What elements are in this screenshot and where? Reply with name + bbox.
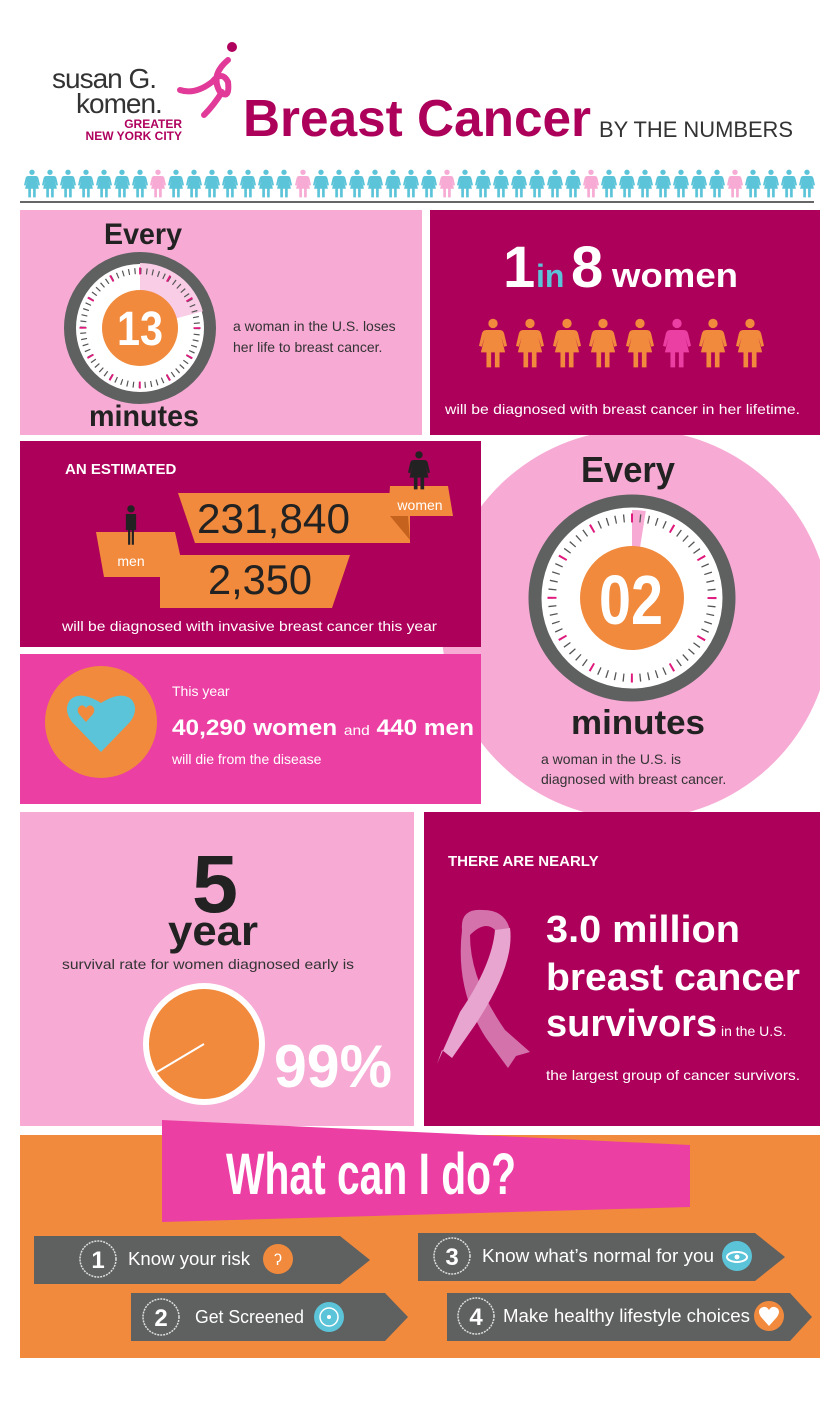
step 1: Know your risk	[128, 1249, 251, 1269]
panel: 5 year survival: year	[168, 907, 258, 954]
panel: every 02 minutes circle	[441, 429, 820, 819]
title	[243, 90, 793, 148]
step 1: 1	[91, 1247, 105, 1274]
panel: survivors: 3.0 million	[546, 909, 740, 951]
panel: this year deaths	[20, 654, 481, 804]
panel: an estimated	[20, 441, 481, 647]
women banner	[178, 493, 410, 543]
panel: an estimated: men	[117, 553, 145, 569]
panel: every 13 minutes	[20, 210, 422, 435]
icon: clock 13	[70, 258, 210, 398]
icon: ribbon figure	[180, 42, 237, 115]
text: loses her life: a woman in the U.S. loses	[233, 318, 396, 334]
step 3	[418, 1233, 785, 1281]
header logo: Susan G. Komen: NEW YORK CITY	[86, 129, 182, 143]
panel: survivors: the largest group of cancer survivors.	[546, 1067, 800, 1083]
panel: 1 in 8 women: 1	[503, 235, 535, 300]
panel: 5 year survival	[20, 812, 414, 1126]
step 3: Know what’s normal for you	[482, 1246, 714, 1266]
panel: survivors: survivors in the U.S.	[546, 1003, 786, 1045]
panel: this year deaths: This year	[172, 683, 230, 699]
panel: an estimated: 2,350	[208, 556, 312, 603]
panel: every 02 minutes circle: Every	[581, 449, 675, 490]
banner heading	[162, 1120, 690, 1222]
panel: 1 in 8 women: women	[611, 257, 738, 295]
pie chart 99%	[146, 986, 262, 1102]
panel: an estimated: women	[396, 497, 443, 513]
panel: 5 year survival: 99%	[274, 1033, 392, 1100]
panel: 1 in 8 women: in	[536, 258, 564, 294]
step 4: Make healthy lifestyle choices	[503, 1306, 750, 1326]
icon: clock 13: 13	[117, 303, 163, 356]
panel: survivors	[424, 812, 820, 1126]
panel: 1 in 8 women	[430, 210, 820, 435]
step 4: 4	[469, 1304, 483, 1331]
panel: what can I do: What can I do?	[226, 1142, 516, 1207]
panel: every 13 minutes: her life to breast cancer.	[233, 339, 382, 355]
step 2	[131, 1293, 408, 1341]
panel: survivors: THERE ARE NEARLY	[448, 853, 599, 870]
panel: every 02 minutes circle: diagnosed with breast cancer.	[541, 771, 726, 787]
icon: 8 women	[479, 319, 764, 367]
step 2: Get Screened	[195, 1307, 304, 1327]
icon: clock 02: 02	[599, 561, 663, 639]
panel: this year deaths: 40,290 women and 440 men	[172, 715, 474, 740]
panel: 5 year survival: survival rate for women diagnosed early is	[62, 956, 354, 972]
icon: pink ribbon	[437, 910, 530, 1068]
women tag	[388, 486, 453, 516]
panel: an estimated: 231,840	[197, 495, 350, 542]
panel: every 13 minutes: minutes	[89, 400, 199, 433]
header logo: Susan G. Komen	[52, 42, 237, 143]
icon: clock 02	[535, 501, 729, 695]
panel: 1 in 8 women: 8	[571, 235, 603, 300]
panel: 1 in 8 women: will be diagnosed with breast cancer in her lifetime.	[444, 401, 800, 417]
step 3: 3	[445, 1244, 459, 1271]
icon: man figure	[126, 505, 136, 545]
panel: an estimated: AN ESTIMATED	[65, 461, 177, 478]
panel: every 13 minutes: Every	[104, 218, 182, 251]
icon: woman figure	[408, 451, 430, 489]
panel: what can I do	[20, 1120, 820, 1358]
panel: survivors: breast cancer	[546, 957, 800, 999]
panel: an estimated: will be diagnosed with invasive breast cancer this year	[61, 618, 437, 634]
step 1: ʔ	[274, 1252, 282, 1269]
panel: every 02 minutes circle: a woman in the U.S. is	[541, 751, 681, 767]
step 4	[447, 1293, 812, 1341]
title: Breast Cancer	[243, 90, 591, 148]
panel: this year deaths: will die from the disease	[171, 751, 322, 767]
header logo: Susan G. Komen: GREATER	[124, 117, 182, 131]
panel: 5 year survival: 5	[192, 839, 238, 930]
step 2: 2	[154, 1305, 168, 1332]
panel: every 02 minutes circle: minutes	[571, 704, 705, 742]
header logo: Susan G. Komen: komen.	[76, 88, 162, 119]
header logo: Susan G. Komen: susan G.	[52, 63, 156, 94]
men tag and banner	[96, 532, 185, 577]
title: BY THE NUMBERS	[599, 117, 793, 142]
step 1	[34, 1236, 370, 1284]
row of figures	[24, 170, 815, 197]
icon: heart circle	[45, 666, 157, 778]
